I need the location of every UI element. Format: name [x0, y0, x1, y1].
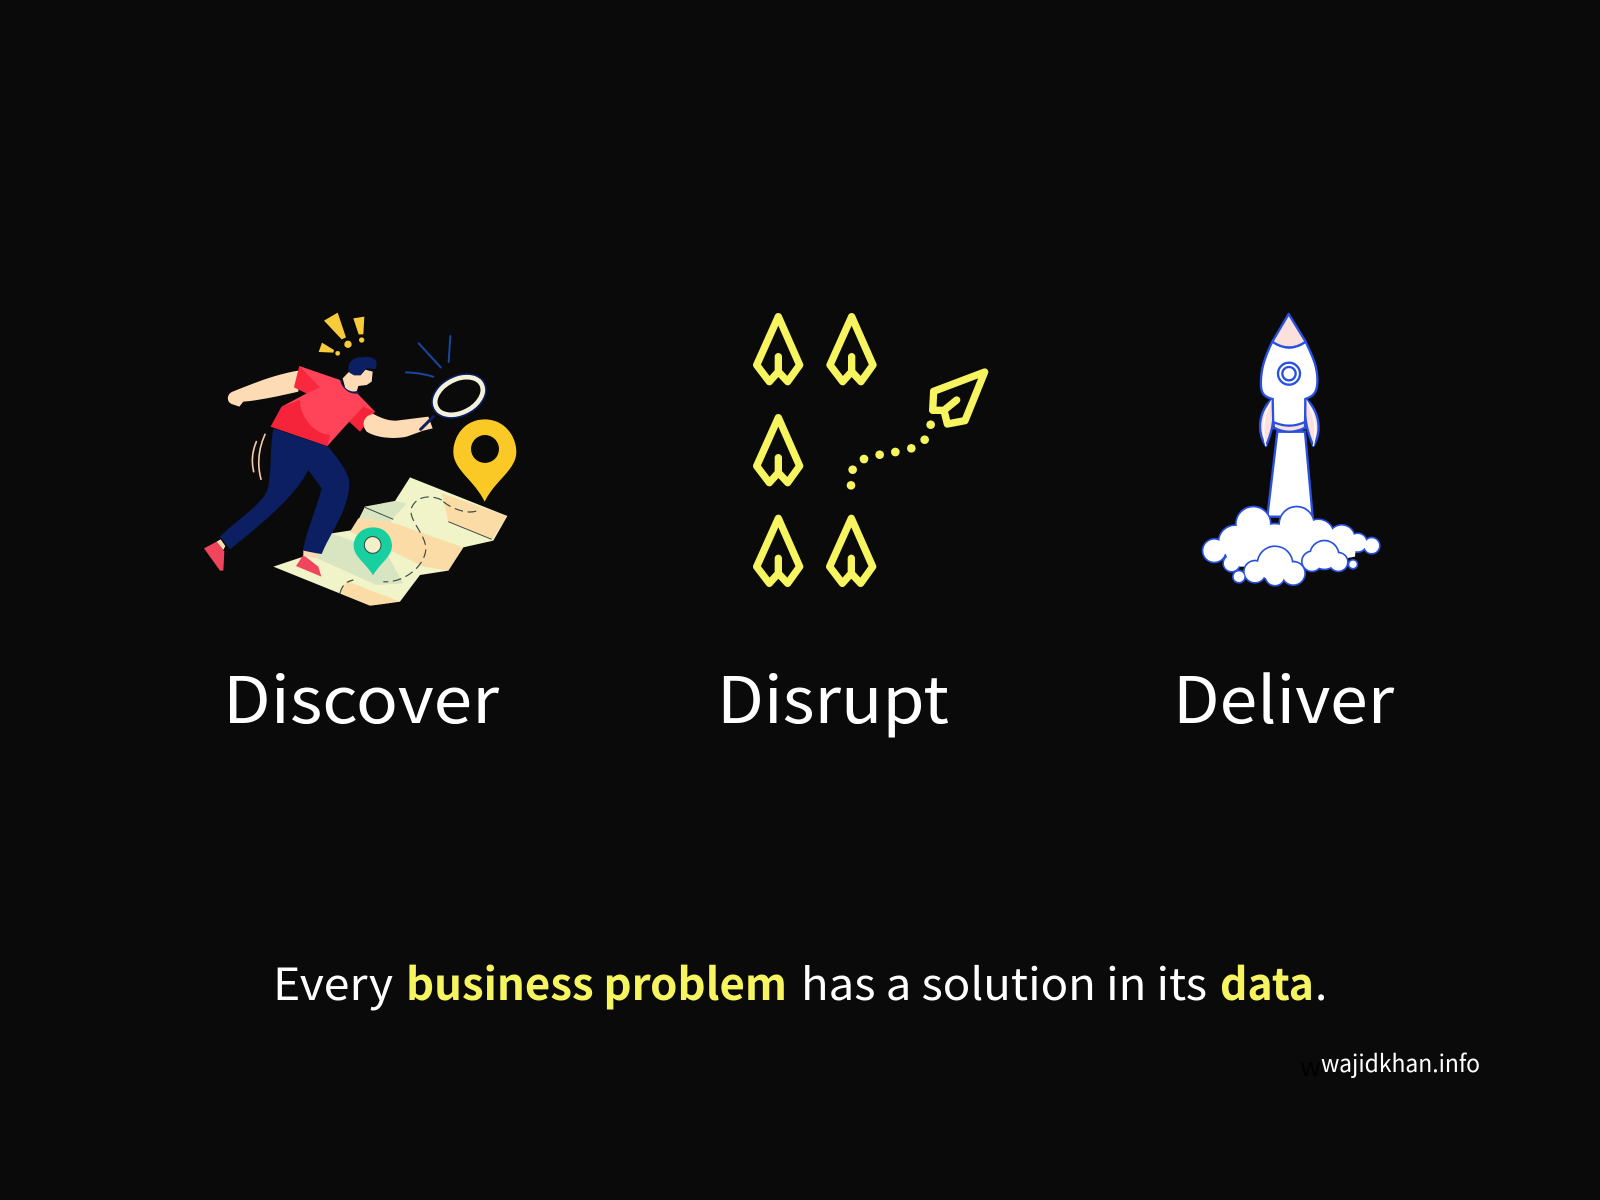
front puff right [1301, 540, 1358, 572]
t-shirt [271, 366, 375, 446]
arrow bottom right [830, 518, 873, 583]
tagline [273, 949, 1327, 1013]
map [273, 477, 507, 606]
arrow bottom left [757, 518, 800, 583]
front arm [364, 414, 433, 438]
exhaust trail [1267, 432, 1313, 517]
back arm [228, 371, 298, 407]
legs [220, 428, 349, 554]
website credit: wajidkhan.info [1321, 1044, 1480, 1079]
tagline: data [1220, 949, 1314, 1013]
tagline: business problem [406, 949, 787, 1013]
head and neck [341, 357, 377, 393]
icon: rocket launch [1202, 314, 1381, 587]
icon: explorer with magnifier and map [204, 313, 516, 606]
green pin [354, 527, 392, 575]
smoke cloud [1202, 506, 1381, 587]
arrow middle left [757, 418, 800, 483]
heading: Deliver: Deliver [1173, 650, 1394, 742]
tagline: . [1315, 949, 1327, 1013]
rocket fins [1260, 399, 1319, 446]
exclamation marks [319, 313, 364, 356]
faint watermark letter: w [1300, 1047, 1321, 1084]
escaping arrow [933, 372, 985, 424]
yellow pin [453, 419, 516, 502]
tagline: Every [273, 949, 393, 1013]
heading: Disrupt: Disrupt [717, 650, 949, 742]
icon: arrows breaking formation [757, 317, 985, 583]
motion lines [252, 434, 265, 479]
front puff left [1232, 545, 1306, 587]
rocket body [1261, 314, 1317, 432]
arrow top left [757, 317, 800, 382]
tagline: has a solution in its [801, 949, 1207, 1013]
shoes [204, 542, 321, 577]
search rays [406, 336, 450, 377]
magnifying glass [421, 368, 491, 429]
dotted path [847, 420, 935, 490]
heading: Discover: Discover [223, 650, 499, 742]
arrow top right [830, 317, 873, 382]
